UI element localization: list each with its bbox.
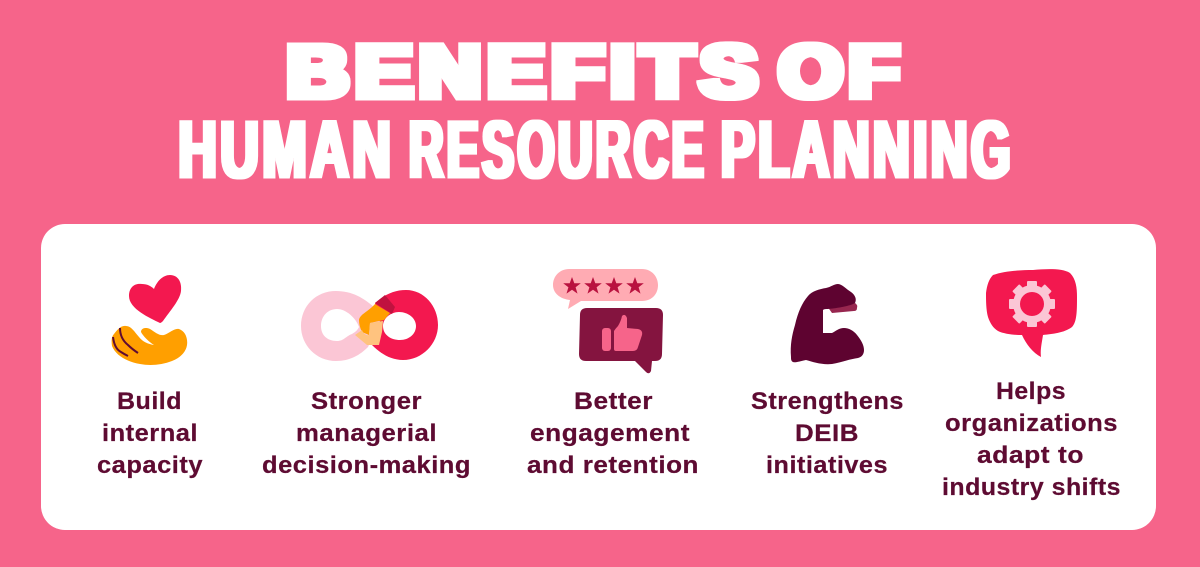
label: organizations xyxy=(945,410,1118,437)
title xyxy=(178,30,1014,196)
label xyxy=(942,378,1121,501)
icon: gear speech bubble xyxy=(986,269,1077,357)
label: and retention xyxy=(527,452,699,479)
title: RESOURCE xyxy=(409,104,707,196)
label: managerial xyxy=(296,420,437,447)
benefit: better engagement and retention xyxy=(527,269,699,479)
icon: heart in hand xyxy=(112,275,187,365)
label: Build xyxy=(117,388,182,415)
title: PLANNING xyxy=(721,104,1014,196)
label xyxy=(97,388,203,479)
label: internal xyxy=(102,420,198,447)
label: Stronger xyxy=(311,388,422,415)
benefit: build internal capacity xyxy=(97,275,203,479)
title: BENEFITS xyxy=(287,30,764,113)
label xyxy=(751,388,904,479)
label: Helps xyxy=(996,378,1066,405)
label: adapt to xyxy=(977,442,1084,469)
label xyxy=(527,388,699,479)
label xyxy=(262,388,471,479)
label: engagement xyxy=(530,420,690,447)
benefit: helps organizations adapt xyxy=(942,269,1121,501)
benefit: strengthens DEIB initiatives xyxy=(751,284,904,479)
label: capacity xyxy=(97,452,203,479)
icon: flexed arm xyxy=(791,284,864,364)
icon: rating and thumbs up xyxy=(553,269,663,373)
benefit: stronger managerial decision-making xyxy=(262,290,471,479)
title: OF xyxy=(779,30,906,113)
icon: infinity with handshake xyxy=(301,290,438,361)
label: Strengthens xyxy=(751,388,904,415)
title: HUMAN xyxy=(178,104,394,196)
label: decision-making xyxy=(262,452,471,479)
label: DEIB xyxy=(795,420,859,447)
label: industry shifts xyxy=(942,474,1121,501)
label: Better xyxy=(574,388,653,415)
label: initiatives xyxy=(766,452,888,479)
panel: benefits xyxy=(41,224,1156,530)
